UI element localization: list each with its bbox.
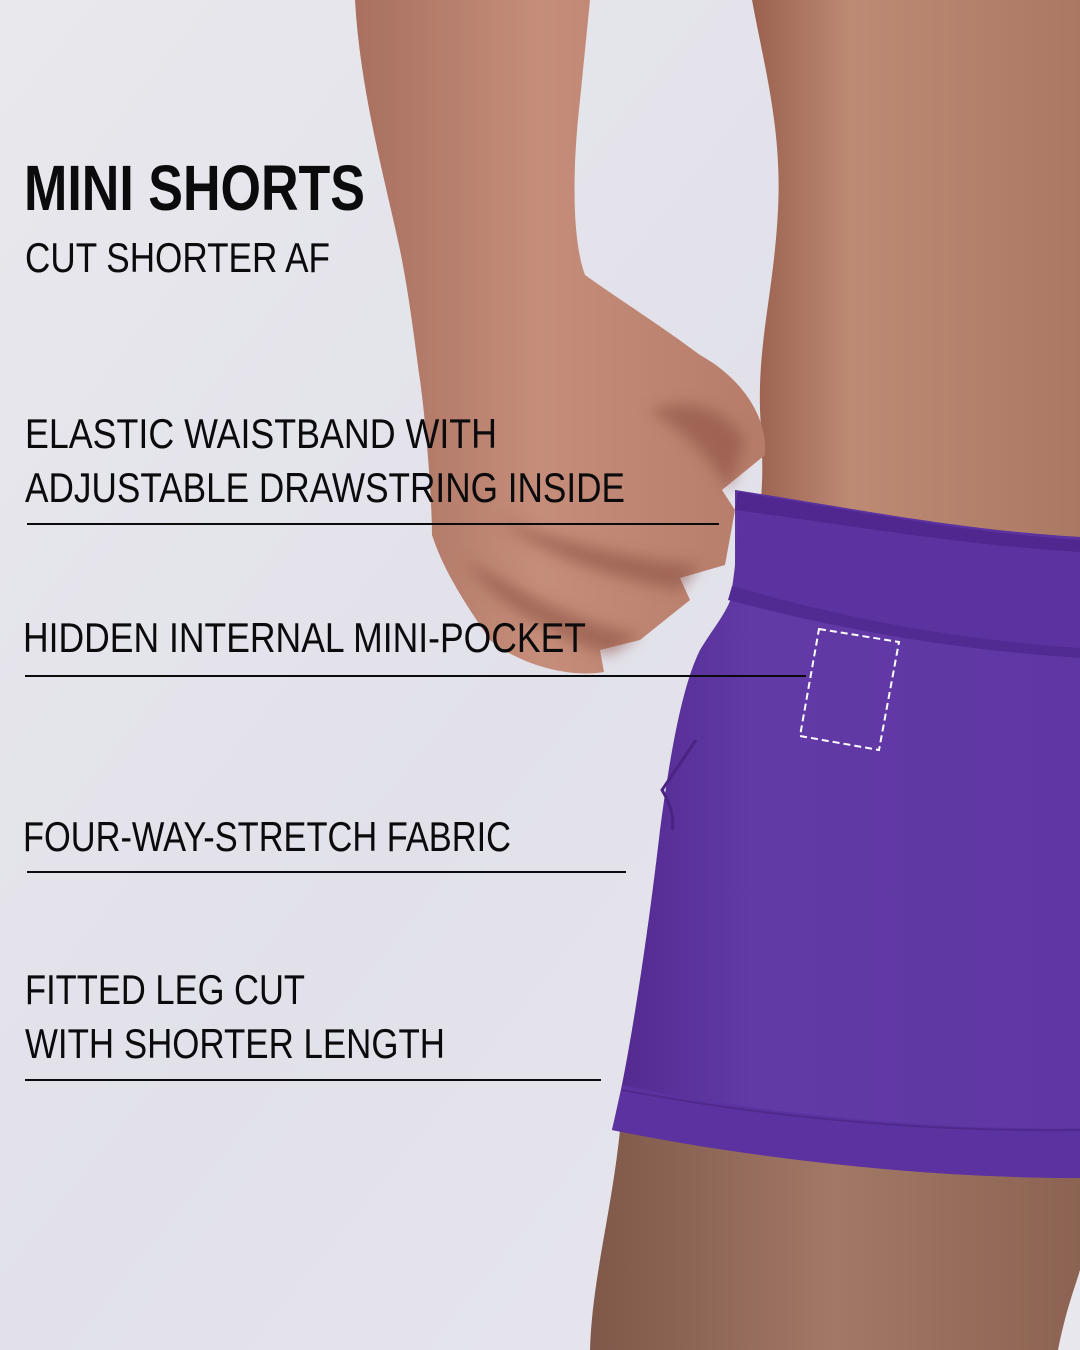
photo: arm and hand (355, 0, 765, 673)
callout: waistband (25, 410, 719, 524)
callout: leg cut (25, 966, 601, 1080)
callout: fabric: FOUR-WAY-STRETCH FABRIC (23, 813, 511, 860)
callout: leg cut: FITTED LEG CUT (25, 966, 305, 1013)
subtitle: CUT SHORTER AF (25, 234, 330, 281)
title: MINI SHORTS (24, 152, 365, 224)
photo: purple mini shorts (612, 490, 1080, 1178)
callout: waistband: ADJUSTABLE DRAWSTRING INSIDE (25, 464, 625, 511)
icon: dashed pocket outline (800, 629, 899, 750)
photo: torso (752, 0, 1080, 560)
photo: hand shading (465, 404, 745, 655)
callout: leg cut: WITH SHORTER LENGTH (25, 1020, 445, 1067)
photo: leg (590, 1130, 1080, 1350)
callout: waistband: ELASTIC WAISTBAND WITH (25, 410, 497, 457)
callout: mini-pocket: HIDDEN INTERNAL MINI-POCKET (23, 614, 586, 661)
